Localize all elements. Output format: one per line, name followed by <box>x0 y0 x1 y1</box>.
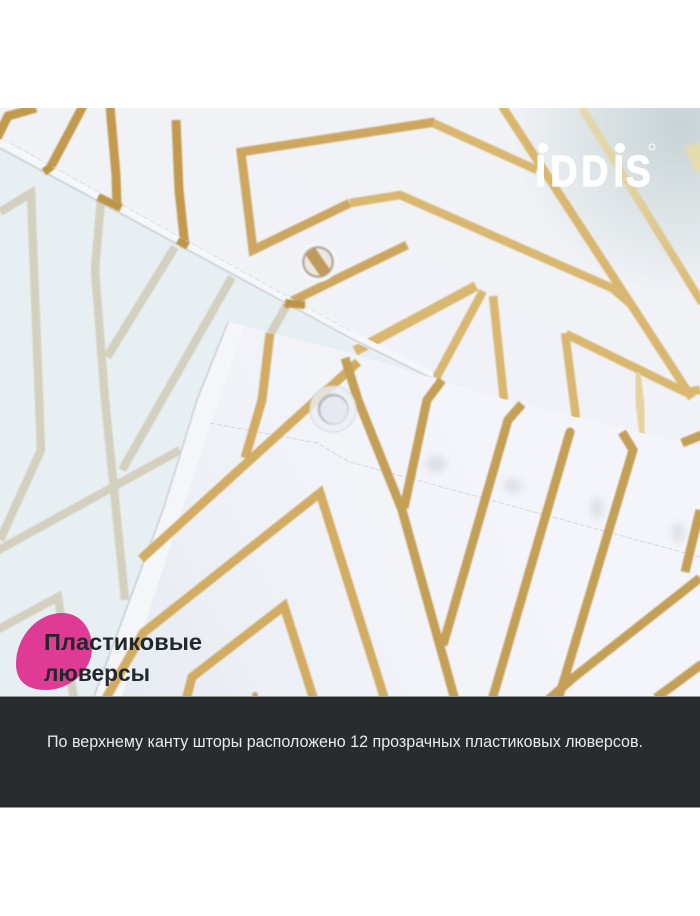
feature heading: люверсы <box>44 660 150 686</box>
gold pattern on front panel, vertical lines <box>345 358 700 700</box>
back curtain panel <box>0 148 460 696</box>
gold pattern on upper flap, geometric shape <box>241 122 435 305</box>
logo: IDDIS: IDDIS <box>536 146 651 196</box>
front curtain panel <box>94 322 700 700</box>
fabric creases <box>425 456 684 543</box>
upper curtain flap <box>0 106 700 460</box>
hem of upper flap with stitching <box>0 139 433 380</box>
feature heading: Пластиковые <box>44 629 202 655</box>
pink accent blob <box>16 613 92 690</box>
grommet: front panel transparent plastic <box>310 386 356 432</box>
grommet: back panel <box>301 245 335 283</box>
pale gold pattern on back panel <box>0 193 287 700</box>
dark caption band <box>0 696 700 808</box>
faded gold lines at right <box>582 108 700 303</box>
gold pattern on front panel, upper lines <box>105 333 385 700</box>
gold pattern on upper flap, left <box>0 106 185 247</box>
horizontal stitching line <box>210 423 700 557</box>
side hem of front panel <box>96 457 192 696</box>
feature heading <box>44 629 202 686</box>
product photo: shower curtain <box>0 106 700 700</box>
caption text: По верхнему канту шторы расположено 12 прозрачных пластиковых люверсов. <box>47 733 643 751</box>
